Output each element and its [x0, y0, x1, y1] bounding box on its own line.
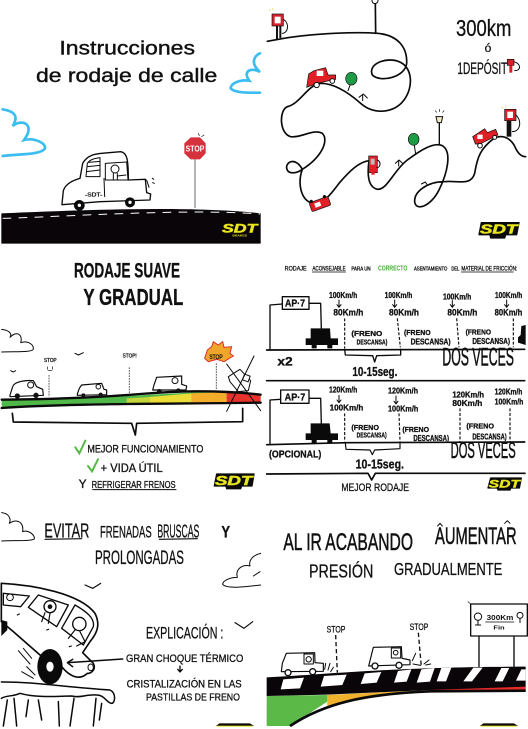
AP-7 sign 1: AP·7 — [285, 299, 305, 310]
speeds row 2: 100Km/h — [495, 397, 523, 406]
title: rodaje suave y gradual: Y GRADUAL — [83, 284, 183, 310]
stop post 2: STOP! — [123, 353, 137, 359]
speeds row 2: 80Km/h — [452, 399, 482, 408]
title: rodaje suave y gradual — [74, 258, 183, 310]
summary bracket — [267, 473, 525, 480]
text: 300km o 1 depósito — [456, 15, 520, 78]
icon: red car bottom — [308, 194, 331, 212]
bracket — [12, 408, 243, 435]
icon: road signs small lower — [395, 160, 427, 185]
icon: end fuel pump — [501, 105, 520, 137]
text: explicación: PASTILLAS DE FRENO — [146, 693, 240, 704]
title: aumentar presión gradualmente — [283, 521, 517, 581]
title: aumentar presión gradualmente: AL IR ACABANDO — [283, 529, 413, 556]
speeds row 1: 100Km/h — [385, 291, 412, 300]
icon: car with driver: -SDT- — [85, 192, 102, 198]
title: instrucciones — [36, 38, 217, 87]
label opcional: (OPCIONAL) — [269, 449, 321, 460]
title: instrucciones: de rodaje de calle — [36, 66, 217, 87]
freno descansa row 1: DESCANSA) — [411, 337, 451, 346]
benefits list: + VIDA ÚTIL — [101, 460, 163, 475]
freno descansa row 2: (FRENO — [466, 422, 494, 431]
icon: road sign small — [359, 94, 367, 101]
text: explicación: GRAN CHOQUE TÉRMICO — [126, 652, 243, 665]
label 10-15 seg row 1: 10-15seg. — [352, 365, 397, 379]
icon: cliff — [1, 682, 115, 726]
benefits list — [75, 441, 203, 491]
speeds row 2: 120Km/h — [388, 387, 418, 396]
freno descansa row 2: DESCANSA) — [357, 431, 387, 440]
speeds row 2: 120Km/h — [452, 390, 484, 399]
freno descansa row 1: DESCANSA) — [472, 337, 510, 346]
logo: SDT brakes: BRAKES — [232, 233, 247, 237]
header text — [285, 264, 518, 273]
divider — [267, 378, 525, 383]
icon: car 2 — [369, 647, 431, 669]
icon: black car 1 — [306, 328, 338, 348]
logo: SDT brakes: SDT — [480, 223, 519, 237]
icon: start fuel pump — [269, 8, 288, 39]
panel: rodaje aconsejable — [267, 264, 526, 494]
finish sign: Fin — [493, 625, 505, 631]
icon: cloud left — [2, 513, 34, 541]
stop post 1: STOP — [327, 625, 345, 635]
icon: car fragment right 1 — [518, 325, 526, 345]
speeds row 1: 80Km/h — [495, 307, 523, 317]
freno descansa row 2 — [351, 422, 507, 443]
header text: ACONSEJABLE — [312, 267, 346, 273]
road — [1, 209, 261, 244]
stop post 2 — [410, 622, 428, 667]
road line 1 — [267, 347, 525, 352]
logo: SDT brakes — [488, 478, 522, 490]
speeds row 1: 80Km/h — [447, 307, 478, 317]
speeds row 1 — [329, 291, 523, 317]
stop post 1 — [44, 358, 57, 397]
panel: instrucciones de rodaje — [1, 38, 261, 244]
freno descansa row 1: (FRENO — [351, 329, 382, 338]
icon: burning stop sign — [205, 342, 233, 390]
icon: car 2 — [77, 383, 107, 397]
stop post 1 — [327, 625, 345, 673]
icon: crashed crossed car — [227, 356, 261, 411]
bracket row 1 — [345, 349, 401, 362]
AP-7 sign 1 — [270, 297, 321, 349]
icon: cloud right — [223, 553, 261, 587]
stop post 2: STOP — [410, 622, 428, 632]
title: evitar frenadas bruscas y prolongadas: BRUSCAS — [157, 521, 199, 542]
logo: SDT brakes — [222, 222, 260, 237]
label 10-15 seg row 2: 10-15seg. — [356, 457, 404, 471]
logo: SDT brakes: SDT — [215, 474, 254, 488]
header text: RODAJE — [285, 266, 307, 273]
label x2: x2 — [277, 355, 293, 369]
road dashes — [3, 212, 260, 218]
icon: car 1 — [281, 653, 333, 676]
icon: blue cloud left — [3, 109, 45, 156]
bracket row 2 — [345, 442, 400, 455]
logo: SDT brakes: SDT — [489, 478, 522, 490]
icons: birds — [85, 583, 253, 628]
winding road — [267, 33, 526, 207]
speeds row 2: 120Km/h — [329, 386, 357, 395]
AP-7 sign 2: AP·7 — [285, 393, 306, 404]
black road — [267, 667, 526, 696]
benefits list: MEJOR FUNCIONAMIENTO — [87, 444, 203, 456]
icon: stop sign: STOP — [186, 145, 205, 154]
finish sign: 300Km — [487, 613, 514, 622]
logo: SDT brakes — [214, 474, 254, 489]
freno descansa row 1: (FRENO — [404, 328, 431, 337]
speeds row 1: 80Km/h — [333, 307, 364, 317]
speeds row 2 — [329, 386, 523, 413]
speeds row 2: 120Km/h — [495, 388, 522, 397]
benefits list: REFRIGERAR FRENOS — [92, 480, 176, 491]
header text: CORRECTO — [378, 264, 408, 273]
icon: car with driver — [62, 152, 154, 211]
title: aumentar presión gradualmente: PRESIÓN — [309, 560, 373, 581]
logo: SDT brakes — [479, 223, 519, 238]
text: explicación: CRISTALIZACIÓN EN LAS — [127, 678, 242, 691]
icon: green tree middle — [408, 133, 419, 154]
icons: birds — [11, 353, 83, 372]
text: mejor rodaje: MEJOR RODAJE — [341, 482, 409, 494]
panel: evitar frenadas bruscas — [1, 513, 261, 727]
freno descansa row 2: DESCANSA) — [413, 434, 449, 443]
arrow to brake — [67, 659, 123, 667]
text: explicación — [126, 623, 243, 704]
icon: street lamp lower — [435, 109, 444, 144]
icon: car 3 — [153, 376, 187, 394]
icon: street lamp top — [372, 0, 378, 33]
text: 300km o 1 depósito: 300km — [456, 15, 511, 41]
header text: PARA UN — [351, 267, 371, 273]
road temperature band — [2, 391, 261, 408]
speeds row 2: 100Km/h — [330, 403, 363, 413]
dashed lines row 2 — [345, 408, 510, 442]
finish sign — [468, 602, 527, 667]
speeds row 2: 100Km/h — [388, 403, 418, 413]
crosswalk stripes — [281, 668, 526, 689]
stop post 1: STOP — [44, 358, 57, 364]
road line 2 — [267, 442, 525, 445]
freno descansa row 1: (FRENO — [466, 327, 491, 336]
title: evitar frenadas bruscas y prolongadas: EVITAR — [44, 520, 89, 543]
icon: red car top — [307, 68, 336, 88]
header text: DEL — [451, 267, 459, 273]
title: evitar frenadas bruscas y prolongadas: Y — [221, 523, 230, 542]
speeds row 1: 100Km/h — [329, 291, 357, 300]
freno descansa row 2: (FRENO — [351, 423, 379, 432]
speeds row 1: 100Km/h — [495, 291, 522, 300]
freno descansa row 1 — [351, 327, 510, 346]
speeds row 1: 100Km/h — [443, 292, 471, 301]
panel: 300km route — [267, 0, 526, 238]
panel: aumentar presión gradualmente — [267, 521, 527, 727]
stop post 2 — [123, 353, 137, 394]
speeds row 1: 80Km/h — [389, 307, 419, 317]
AP-7 sign 2 — [270, 390, 321, 444]
icon: burning stop sign: STOP — [209, 354, 223, 361]
freno descansa row 2: DESCANSA) — [472, 432, 507, 441]
icon: cloud — [2, 329, 33, 352]
colored pressure road — [267, 686, 526, 726]
icon: tilted car — [1, 583, 98, 684]
icon: black car 2 — [306, 423, 338, 443]
icon: blue cloud right — [231, 53, 260, 93]
header text: ASENTAMIENTO — [414, 267, 447, 273]
title: evitar frenadas bruscas y prolongadas — [44, 520, 230, 569]
icon: middle fuel pump — [369, 156, 380, 175]
logo: SDT brakes: SDT — [222, 222, 260, 236]
icon: red car right — [473, 129, 498, 148]
benefits list: Y — [79, 477, 87, 491]
logo top: SDT brakes — [480, 723, 518, 727]
icon: stop sign — [184, 133, 206, 208]
icon: car 1 — [10, 381, 43, 399]
title: evitar frenadas bruscas y prolongadas: PROLONGADAS — [95, 548, 184, 569]
text: 300km o 1 depósito: ó — [485, 41, 492, 55]
freno descansa row 2: (FRENO — [402, 425, 429, 434]
title: evitar frenadas bruscas y prolongadas: FRENADAS — [100, 523, 152, 542]
freno descansa row 1: DESCANSA) — [357, 337, 388, 346]
title: instrucciones: Instrucciones — [59, 38, 195, 59]
text: explicación: EXPLICACIÓN : — [146, 623, 223, 642]
panel: rodaje suave y gradual — [2, 258, 261, 491]
logo top: SDT brakes — [216, 723, 254, 727]
title: rodaje suave y gradual: RODAJE SUAVE — [74, 258, 180, 282]
dashed lines row 1 — [345, 318, 513, 348]
icon: green tree top — [346, 72, 357, 91]
